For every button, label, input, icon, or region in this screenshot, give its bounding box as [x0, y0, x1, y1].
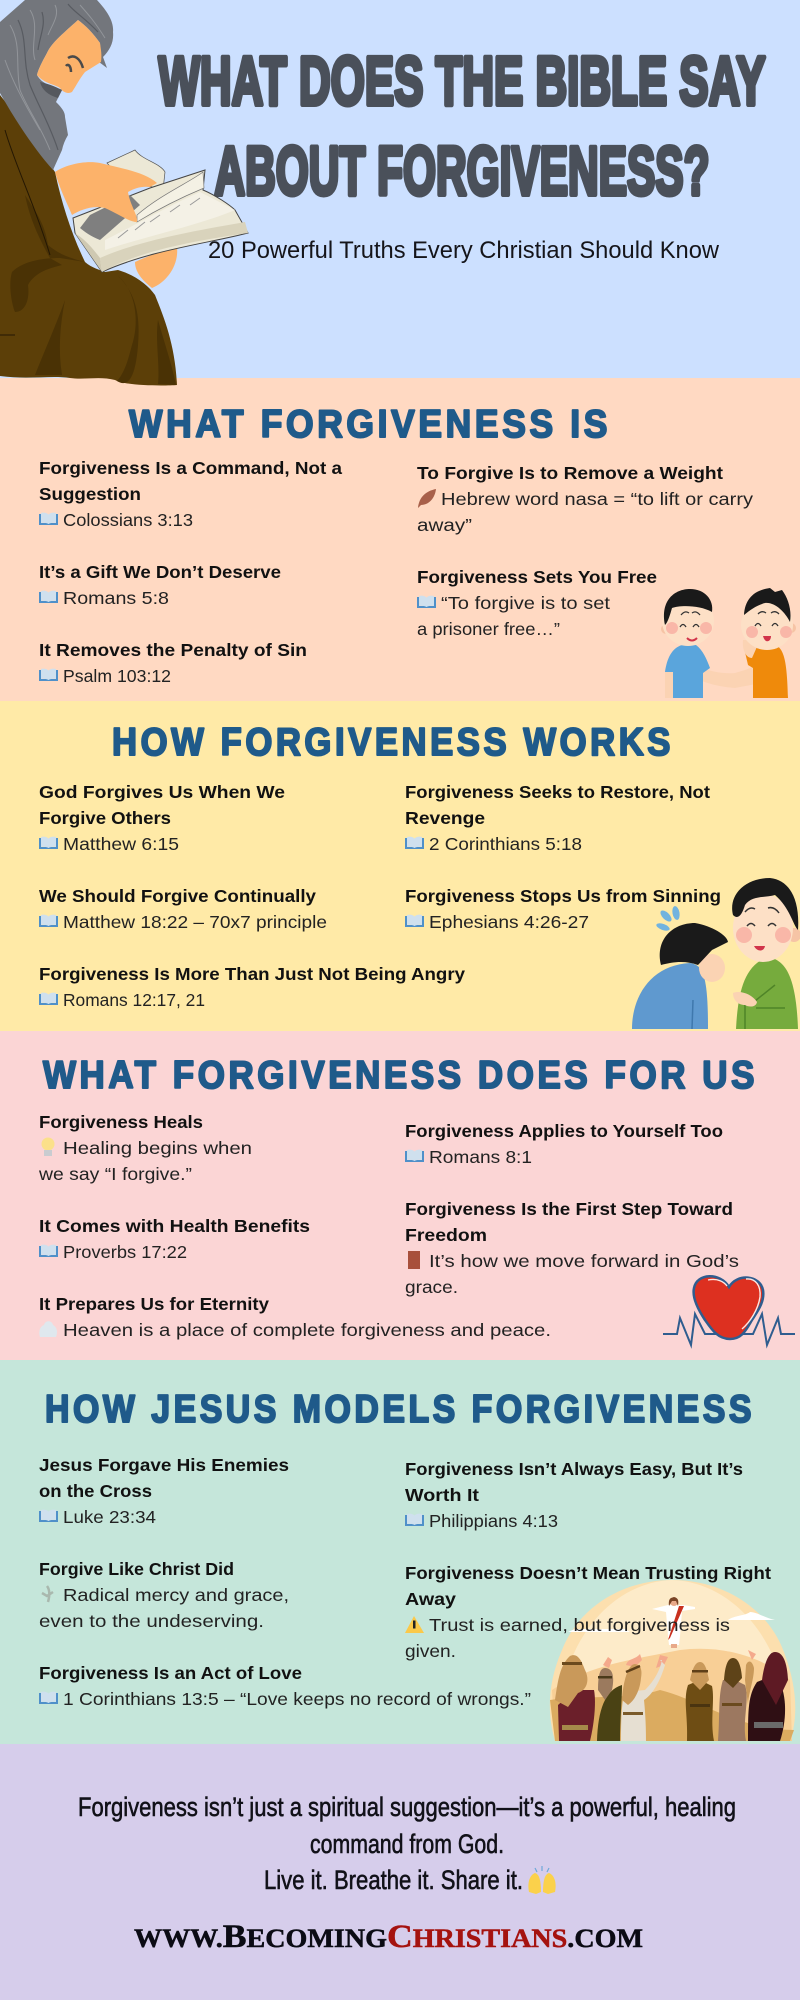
item: eternity: It Prepares Us for Eternity [39, 1294, 269, 1314]
icon: reading hand [55, 162, 157, 222]
item: penalty: It Removes the Penalty of Sin [39, 640, 307, 660]
item: health: Proverbs 17:22 [63, 1242, 187, 1262]
icon: face [37, 20, 101, 93]
figure: disciple two [597, 1668, 622, 1741]
item: free: Forgiveness Sets You Free [417, 567, 657, 587]
item: god forgives: Matthew 6:15 [63, 834, 179, 854]
item: yourself: Romans 8:1 [429, 1147, 532, 1167]
closing message [78, 1792, 736, 1895]
illustration: two boys shaking hands [661, 588, 796, 698]
item: restore: Revenge [405, 808, 485, 828]
item: penalty: Psalm 103:12 [63, 666, 171, 686]
item: like christ [39, 1559, 289, 1631]
closing message: command from God. [310, 1829, 504, 1859]
item: command: Colossians 3:13 [63, 510, 193, 530]
heading: WHAT FORGIVENESS IS [129, 403, 611, 446]
figure: disciple one [555, 1655, 595, 1741]
item: health: It Comes with Health Benefits [39, 1216, 310, 1236]
item: trust [405, 1563, 771, 1661]
item: heals [38, 1112, 252, 1184]
item: act of love [39, 1663, 531, 1709]
item: command: Forgiveness Is a Command, Not a [39, 458, 342, 478]
panel: how forgiveness works [0, 701, 800, 1031]
item: heals: we say “I forgive.” [38, 1164, 192, 1184]
item: enemies [39, 1455, 289, 1527]
panel: how jesus models forgiveness [0, 1360, 800, 1744]
item: worth it: Forgiveness Isn’t Always Easy, But It’s [405, 1459, 743, 1479]
item: heals: Healing begins when [63, 1138, 252, 1158]
item: yourself: Forgiveness Applies to Yourself Too [405, 1121, 723, 1141]
item: like christ: Radical mercy and grace, [63, 1585, 289, 1605]
item: penalty [39, 640, 307, 686]
icon: hair and beard [0, 0, 113, 170]
item: weight: away” [417, 515, 472, 535]
item: act of love: Forgiveness Is an Act of Love [39, 1663, 302, 1683]
panel: footer [0, 1744, 800, 2000]
item: restore: 2 Corinthians 5:18 [429, 834, 582, 854]
item: command: Suggestion [39, 484, 141, 504]
item: trust: Away [405, 1589, 456, 1609]
item: like christ: even to the undeserving. [39, 1611, 264, 1631]
panel: what forgiveness does for us [0, 1031, 800, 1360]
item: weight: To Forgive Is to Remove a Weight [417, 463, 723, 483]
item: continually [39, 886, 327, 932]
figure: disciple four [686, 1662, 714, 1741]
illustration: disciples watching jesus ascend [550, 1580, 795, 1741]
figure: disciple six [745, 1652, 788, 1741]
item: enemies: Luke 23:34 [63, 1507, 156, 1527]
icon: open book [73, 150, 248, 272]
item: freedom: Forgiveness Is the First Step Toward [405, 1199, 733, 1219]
item: freedom: It’s how we move forward in God’s [429, 1251, 739, 1271]
item: stops sinning: Ephesians 4:26-27 [429, 912, 589, 932]
item: stops sinning: Forgiveness Stops Us from Sinning [405, 886, 721, 906]
item: restore [405, 782, 710, 854]
icon: ascending figure of jesus [652, 1597, 695, 1648]
item: free: a prisoner free…” [417, 619, 560, 639]
item: freedom: grace. [405, 1277, 458, 1297]
item: not angry: Romans 12:17, 21 [63, 990, 205, 1010]
subtitle: 20 Powerful Truths Every Christian Should Know [208, 237, 720, 264]
item: gift: It’s a Gift We Don’t Deserve [39, 562, 281, 582]
item: like christ: Forgive Like Christ Did [39, 1559, 234, 1579]
figure: disciple three [621, 1660, 665, 1741]
title [158, 42, 766, 210]
item: eternity: Heaven is a place of complete forgiveness and peace. [63, 1320, 551, 1340]
item: worth it: Worth It [405, 1485, 479, 1505]
item: command [39, 458, 342, 530]
item: enemies: on the Cross [39, 1481, 152, 1501]
heading: HOW FORGIVENESS WORKS [112, 721, 674, 764]
item: continually: Matthew 18:22 – 70x7 principle [63, 912, 327, 932]
item: trust: Trust is earned, but forgiveness is [429, 1615, 730, 1635]
item: free: “To forgive is to set [441, 593, 610, 613]
item: eternity [39, 1294, 551, 1340]
item: trust: Forgiveness Doesn’t Mean Trusting Right [405, 1563, 771, 1583]
item: not angry: Forgiveness Is More Than Just Not Being Angry [39, 964, 465, 984]
item: stops sinning [405, 886, 721, 932]
item: worth it: Philippians 4:13 [429, 1511, 558, 1531]
item: weight: Hebrew word nasa = “to lift or carry [441, 489, 753, 509]
panel: header [0, 0, 800, 378]
item: freedom: Freedom [405, 1225, 487, 1245]
icon: raised hands [528, 1866, 556, 1894]
item: restore: Forgiveness Seeks to Restore, Not [405, 782, 710, 802]
item: god forgives: God Forgives Us When We [39, 782, 285, 802]
panel: what forgiveness is [0, 378, 800, 701]
closing message: Live it. Breathe it. Share it. [264, 1865, 523, 1895]
item: god forgives [39, 782, 285, 854]
item: continually: We Should Forgive Continually [39, 886, 316, 906]
illustration: heart with heartbeat line [663, 1276, 795, 1345]
item: heals: Forgiveness Heals [39, 1112, 203, 1132]
item: gift: Romans 5:8 [63, 588, 169, 608]
item: yourself [405, 1121, 723, 1167]
item: not angry [39, 964, 465, 1010]
illustration: man comforting a bowing man [632, 878, 800, 1029]
figure: disciple five [718, 1658, 747, 1741]
item: freedom [405, 1199, 739, 1297]
item: gift [39, 562, 281, 608]
website address: WWW.BECOMING CHRISTIANS .COM [134, 1919, 643, 1955]
item: worth it [405, 1459, 743, 1531]
item: free [417, 567, 657, 639]
item: weight [417, 463, 753, 535]
item: enemies: Jesus Forgave His Enemies [39, 1455, 289, 1475]
item: trust: given. [405, 1641, 456, 1661]
item: god forgives: Forgive Others [39, 808, 171, 828]
illustration: bearded man reading a book [0, 0, 248, 385]
item: act of love: 1 Corinthians 13:5 – “Love keeps no record of wrongs.” [63, 1689, 531, 1709]
item: health [39, 1216, 310, 1262]
